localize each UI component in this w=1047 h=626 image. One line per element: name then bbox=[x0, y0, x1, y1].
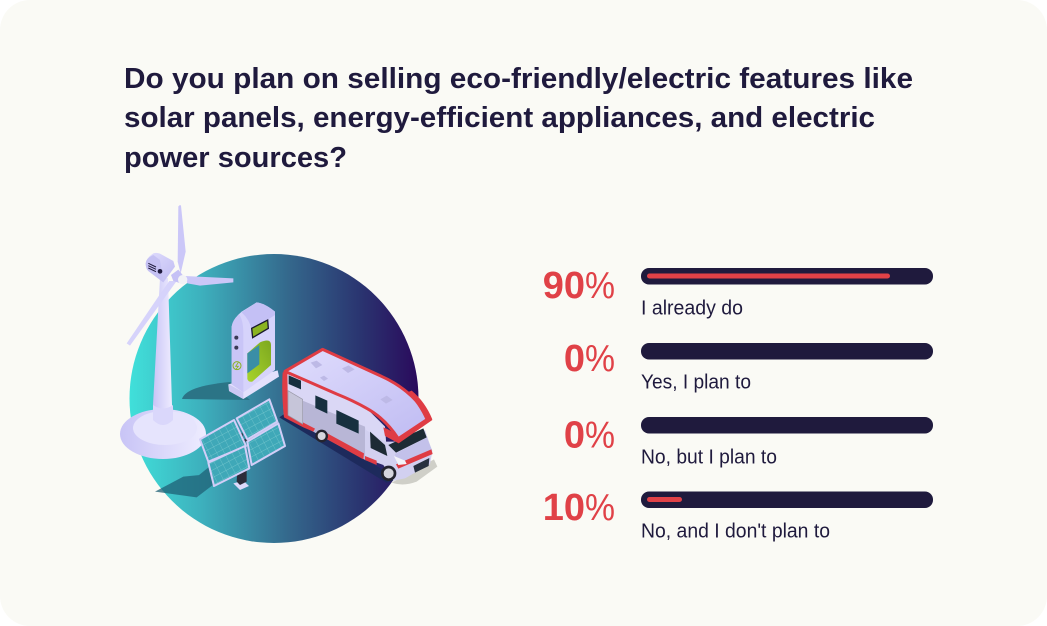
wheels bbox=[315, 430, 328, 442]
label: Yes, I plan to bbox=[641, 372, 751, 394]
value 0%: % bbox=[585, 414, 615, 456]
illustration bbox=[120, 205, 437, 543]
value 10%: % bbox=[585, 487, 615, 529]
label: I already do bbox=[641, 298, 743, 320]
value 90%: 90 bbox=[543, 265, 585, 307]
rear and skirt trim bbox=[282, 372, 315, 432]
result: 0% No, but I plan to bbox=[564, 414, 933, 468]
label: No, and I don't plan to bbox=[641, 520, 830, 542]
icon: camper van bbox=[279, 349, 437, 484]
value 0% bbox=[564, 414, 615, 456]
value 90% bbox=[543, 265, 615, 307]
title: solar panels, energy-efficient appliances, and electric bbox=[124, 102, 875, 134]
label: No, but I plan to bbox=[641, 446, 777, 468]
gradient circle bbox=[130, 254, 418, 543]
value 0%: % bbox=[585, 338, 615, 380]
value 0% bbox=[564, 338, 615, 380]
door bbox=[288, 391, 303, 424]
charger shadow bbox=[182, 382, 250, 400]
title bbox=[124, 63, 913, 174]
icon: wind turbine bbox=[120, 205, 233, 459]
value 10%: 10 bbox=[543, 487, 585, 529]
roof vents bbox=[311, 361, 322, 368]
result: 0% Yes, I plan to bbox=[564, 338, 933, 394]
result: 10% No, and I don't plan to bbox=[543, 487, 933, 542]
value 0%: 0 bbox=[564, 414, 585, 456]
value 10% bbox=[543, 487, 615, 529]
icon: charging station bbox=[228, 302, 279, 399]
body side bbox=[283, 372, 387, 461]
value 90%: % bbox=[585, 265, 615, 307]
bar 0% bbox=[641, 343, 933, 360]
cab bbox=[365, 429, 432, 481]
title: Do you plan on selling eco-friendly/electric features like bbox=[124, 63, 913, 95]
result: 90% I already do bbox=[543, 265, 933, 320]
bar 10% bbox=[641, 492, 933, 508]
icon: solar panel bbox=[155, 399, 285, 497]
roof bbox=[285, 349, 429, 439]
side windows bbox=[289, 375, 301, 389]
bar 0% bbox=[641, 417, 933, 434]
title: power sources? bbox=[124, 142, 347, 174]
value 0%: 0 bbox=[564, 338, 585, 380]
bar 90% bbox=[641, 268, 933, 284]
